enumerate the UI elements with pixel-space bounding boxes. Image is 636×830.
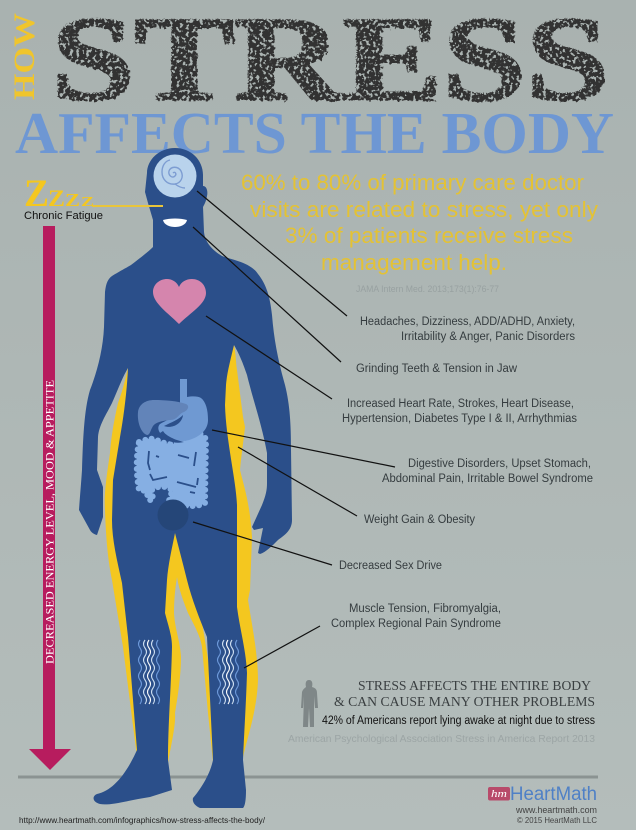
label: heart: Hypertension, Diabetes Type I & II, Arrhythmias [342,413,577,425]
reproductive area [158,500,188,530]
brain [154,154,196,198]
callout heading: & CAN CAUSE MANY OTHER PROBLEMS [334,694,595,709]
human figure [79,148,292,808]
label: digestive: Abdominal Pain, Irritable Bowel Syndrome [382,473,593,485]
title: AFFECTS THE BODY: AFFECTS THE BODY [15,100,614,166]
heart [153,279,206,324]
label: sex drive: Decreased Sex Drive [339,560,442,572]
leader lines [193,191,395,668]
muscle tension waves right leg [218,640,238,704]
statistic callout: 3% of patients receive stress [285,223,573,248]
callout statistic: 42% of Americans report lying awake at night due to stress [322,715,595,727]
energy arrow label: DECREASED ENERGY LEVEL, MOOD & APPETITE [44,380,56,664]
label: heart: Increased Heart Rate, Strokes, Heart Disease, [347,398,574,410]
statistic callout: management help. [321,250,507,275]
body silhouette [79,148,292,808]
HeartMath logo: hm [491,789,507,800]
liver gap [164,415,183,427]
chronic fatigue icon: Zzz: Z [24,172,49,215]
muscle tension waves left leg [138,640,160,704]
label: headaches: Headaches, Dizziness, ADD/ADHD, Anxiety, [360,316,575,328]
chronic fatigue icon: Zzz: Z [48,186,65,211]
citation: JAMA Intern Med. 2013;173(1):76-77 [356,284,499,294]
label: muscle: Muscle Tension, Fibromyalgia, [349,603,501,615]
copyright: © 2015 HeartMath LLC [517,815,597,825]
chronic fatigue icon: Zzz: Z [65,190,80,210]
label: headaches: Irritability & Anger, Panic Disorders [401,331,575,343]
label: muscle [331,603,501,630]
energy arrow [29,226,71,770]
chronic fatigue icon: Zzz: Z [81,195,94,210]
title: HOW: HOW [8,13,41,100]
liver [138,400,188,435]
website: www.heartmath.com [515,805,597,815]
intestines [137,434,206,506]
yellow fat outline right [225,345,258,757]
callout heading: STRESS AFFECTS THE ENTIRE BODY [358,678,591,693]
label: grinding teeth: Grinding Teeth & Tension in Jaw [356,363,518,375]
HeartMath logo: HeartMath [510,784,597,805]
statistic callout: visits are related to stress, yet only [250,197,598,222]
mouth [163,218,187,227]
chronic fatigue label: Chronic Fatigue [24,210,103,222]
statistic callout: 60% to 80% of primary care doctor [241,170,584,195]
icon: small person [301,680,318,727]
label: muscle: Complex Regional Pain Syndrome [331,618,501,630]
yellow fat outline inner legs [160,530,225,763]
label: headaches [360,316,575,343]
bottom callout [288,678,595,745]
yellow fat outline left [105,368,150,765]
statistic callout [241,170,598,275]
stomach [158,379,208,441]
label: weight: Weight Gain & Obesity [364,514,475,526]
label: digestive [382,458,593,485]
stomach inner gap [160,431,184,443]
ground line [18,776,598,778]
source url: http://www.heartmath.com/infographics/how-stress-affects-the-body/ [19,815,266,825]
label: heart [342,398,577,425]
callout citation: American Psychological Association Stress in America Report 2013 [288,733,595,745]
callout heading [334,678,595,709]
fatigue pointer [92,205,163,207]
chronic fatigue icon: Zzz [24,172,94,215]
label: digestive: Digestive Disorders, Upset Stomach, [408,458,591,470]
